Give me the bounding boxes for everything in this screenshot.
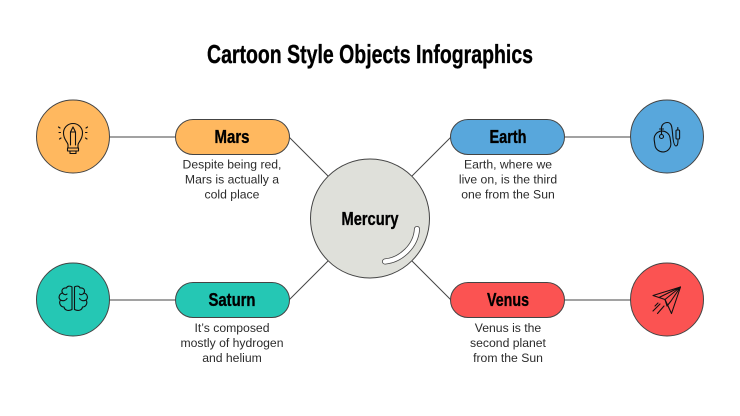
connector: Saturn to Mercury bbox=[289, 261, 328, 300]
text: Mars description: Despite being red, bbox=[183, 158, 281, 172]
text: Venus description: Venus is the bbox=[475, 321, 541, 335]
text: Saturn description: It’s composed bbox=[195, 321, 269, 335]
text: Earth description bbox=[459, 158, 557, 202]
text: Mars description: cold place bbox=[205, 188, 260, 202]
text: Venus description: second planet bbox=[470, 336, 547, 350]
connector: Earth to Mercury bbox=[412, 137, 451, 176]
pill: Venus: Venus bbox=[487, 289, 529, 310]
text: Saturn description bbox=[181, 321, 283, 365]
text: Saturn description: mostly of hydrogen bbox=[181, 336, 283, 350]
central circle: Mercury bbox=[310, 159, 430, 278]
icon circle: paper plane bbox=[630, 263, 704, 336]
pill: Saturn bbox=[176, 282, 290, 318]
text: Earth description: Earth, where we bbox=[464, 158, 552, 172]
central circle: Mercury: Mercury bbox=[342, 208, 399, 229]
pill: Earth bbox=[450, 120, 564, 154]
connector: Mars to Mercury bbox=[289, 137, 328, 176]
pill: Mars bbox=[176, 120, 290, 154]
connector: brain to Saturn bbox=[109, 299, 175, 301]
text: Venus description bbox=[470, 321, 547, 365]
pill: Saturn: Saturn bbox=[208, 289, 256, 310]
text: Mars description bbox=[183, 158, 281, 202]
text: Earth description: live on, is the third bbox=[459, 172, 557, 186]
pill: Venus bbox=[450, 282, 564, 318]
pill: Mars: Mars bbox=[214, 126, 250, 147]
text: Mars description: Mars is actually a bbox=[185, 172, 279, 186]
text: Saturn description: and helium bbox=[202, 351, 262, 365]
icon circle: brain bbox=[36, 263, 110, 336]
connector: lightbulb to Mars bbox=[109, 136, 175, 138]
text: Earth description: one from the Sun bbox=[461, 188, 555, 202]
title: Cartoon Style Objects Infographics bbox=[207, 39, 533, 69]
pill: Earth: Earth bbox=[490, 126, 526, 147]
connector: mouse to Earth bbox=[565, 136, 631, 138]
text: Venus description: from the Sun bbox=[473, 351, 543, 365]
icon circle: lightbulb bbox=[36, 100, 110, 173]
connector: Venus to Mercury bbox=[412, 261, 451, 300]
connector: paper plane to Venus bbox=[565, 299, 631, 301]
icon circle: computer mouse bbox=[630, 100, 704, 173]
